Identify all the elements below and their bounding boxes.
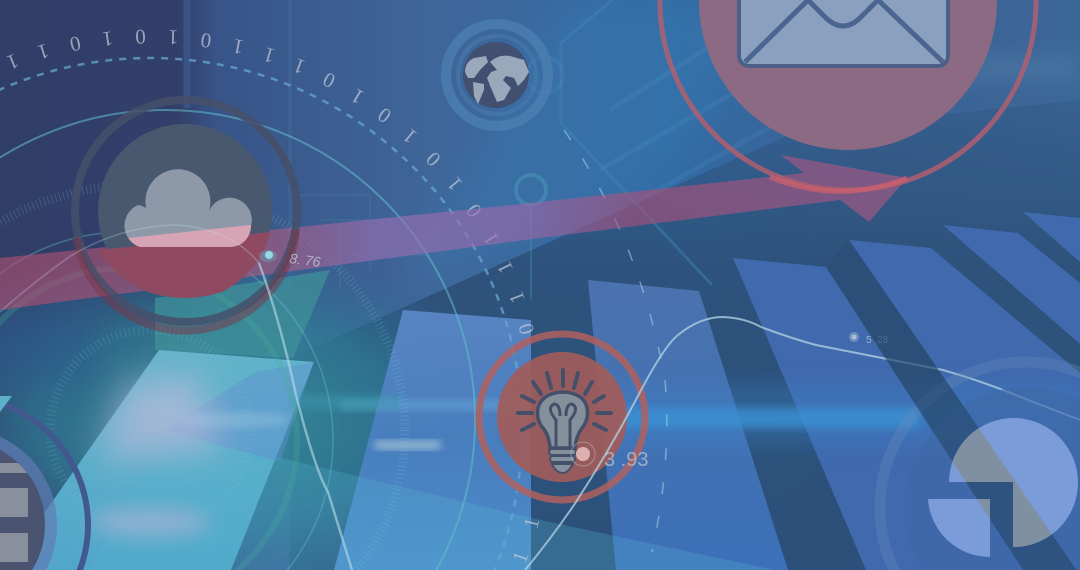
icon: bulb rays (518, 370, 611, 430)
trend curve lower (259, 263, 352, 570)
rays and circuit lines (187, 0, 800, 300)
bar C (588, 280, 788, 570)
bar G (1023, 212, 1080, 262)
trend curve right (525, 317, 1080, 570)
bar D (733, 258, 1023, 570)
icon: pie chart badge (826, 240, 1080, 570)
chart bars (4, 212, 1080, 570)
icon: bulb (538, 392, 587, 448)
icon: cloud badge (75, 100, 297, 331)
light glows (90, 372, 1080, 536)
bar A (4, 350, 314, 570)
icon: globe badge (446, 24, 548, 126)
bar E (849, 240, 1080, 570)
arrow tip over ring (770, 177, 907, 191)
concentric tech rings (0, 58, 522, 570)
bar B (334, 310, 531, 570)
data label 3.93 (571, 442, 648, 471)
binary arc text: 1 (507, 548, 533, 566)
icon: continents (465, 56, 529, 104)
data label 5.28 (849, 332, 889, 346)
data label 8.76: 8. 76 (289, 250, 322, 270)
icon: globe stripes (0, 463, 28, 473)
bar F (943, 225, 1080, 344)
data label 3.93: 3 .93 (604, 449, 648, 471)
trend curve left (0, 225, 259, 312)
icon: cloud (125, 169, 252, 247)
binary arc text (6, 30, 584, 566)
icon: envelope badge (660, 0, 1036, 190)
icon: partial globe badge lower left (0, 396, 88, 570)
data label 5.28: 5 .28 (866, 335, 889, 346)
icon: pie large slice (949, 418, 1078, 547)
icon: pie small slice (928, 499, 990, 557)
teal glow lower left (0, 245, 515, 570)
dashed arc line (564, 130, 667, 552)
icon: light bulb badge (479, 334, 645, 500)
light perspective plane (90, 430, 775, 570)
red arrow (0, 155, 907, 310)
binary arc text: 1 (518, 515, 544, 531)
data label 8.76 (259, 250, 322, 270)
icon: envelope (739, 0, 948, 66)
